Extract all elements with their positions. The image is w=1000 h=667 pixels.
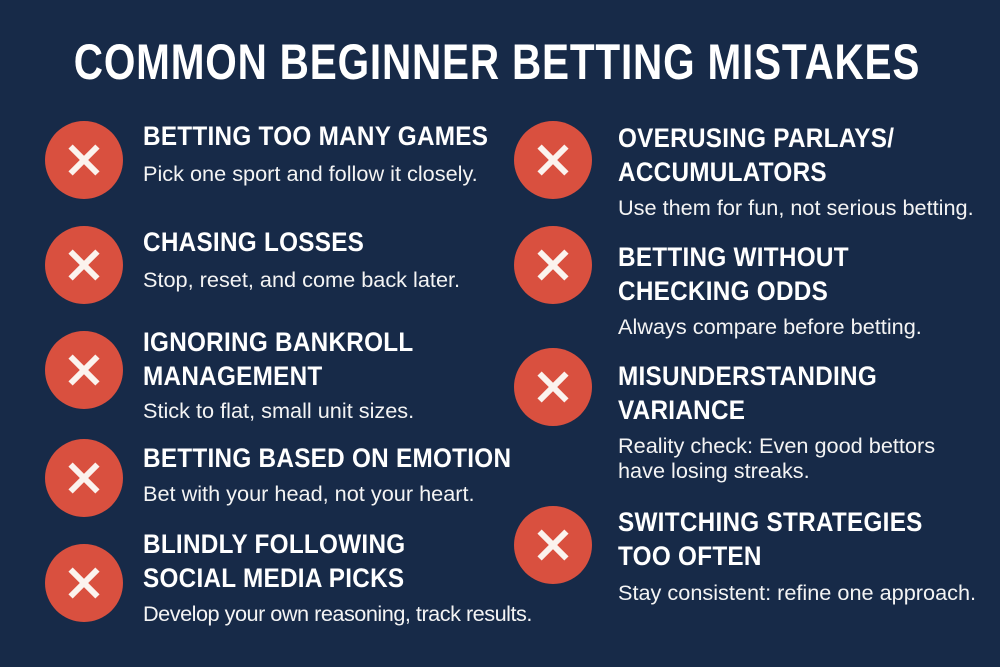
text: Use them for fun, not serious betting. <box>618 195 974 220</box>
icon: x <box>514 226 592 304</box>
item: odds <box>514 226 922 339</box>
item: variance <box>514 348 935 483</box>
text: Develop your own reasoning, track results. <box>143 601 532 626</box>
item: betting too many games <box>45 121 488 199</box>
heading: MISUNDERSTANDING <box>618 361 877 391</box>
item: ignoring bankroll <box>45 327 414 423</box>
icon: x <box>45 439 123 517</box>
heading: CHASING LOSSES <box>143 227 364 257</box>
heading: IGNORING BANKROLL <box>143 327 414 357</box>
icon: x <box>45 121 123 199</box>
heading <box>143 327 414 391</box>
item: social media <box>45 529 532 626</box>
text <box>618 433 935 483</box>
heading <box>143 529 405 593</box>
heading <box>618 507 923 571</box>
heading: SOCIAL MEDIA PICKS <box>143 563 404 593</box>
item: switching strategies <box>514 506 976 605</box>
heading: CHECKING ODDS <box>618 276 828 306</box>
heading <box>618 361 877 425</box>
text: Stick to flat, small unit sizes. <box>143 398 414 423</box>
heading: MANAGEMENT <box>143 361 323 391</box>
item: chasing losses <box>45 226 460 304</box>
heading: OVERUSING PARLAYS/ <box>618 123 894 153</box>
icon: x <box>514 121 592 199</box>
text: have losing streaks. <box>618 458 810 483</box>
text: Reality check: Even good bettors <box>618 433 935 458</box>
heading: BETTING TOO MANY GAMES <box>143 121 488 151</box>
icon: x <box>514 348 592 426</box>
item: parlays <box>514 121 974 220</box>
text: Always compare before betting. <box>618 314 922 339</box>
text: Stop, reset, and come back later. <box>143 267 460 292</box>
text: Stay consistent: refine one approach. <box>618 580 976 605</box>
heading: BETTING BASED ON EMOTION <box>143 443 511 473</box>
text: Bet with your head, not your heart. <box>143 481 475 506</box>
heading: ACCUMULATORS <box>618 157 827 187</box>
text: Pick one sport and follow it closely. <box>143 161 478 186</box>
icon: x <box>45 544 123 622</box>
item: emotion <box>45 439 511 517</box>
heading: BLINDLY FOLLOWING <box>143 529 405 559</box>
heading <box>618 123 894 187</box>
icon: x <box>45 226 123 304</box>
heading: BETTING WITHOUT <box>618 242 849 272</box>
heading: TOO OFTEN <box>618 541 762 571</box>
icon: x <box>514 506 592 584</box>
icon: x <box>45 331 123 409</box>
heading: VARIANCE <box>618 395 745 425</box>
heading <box>618 242 849 306</box>
title: COMMON BEGINNER BETTING MISTAKES <box>74 34 920 90</box>
heading: SWITCHING STRATEGIES <box>618 507 923 537</box>
